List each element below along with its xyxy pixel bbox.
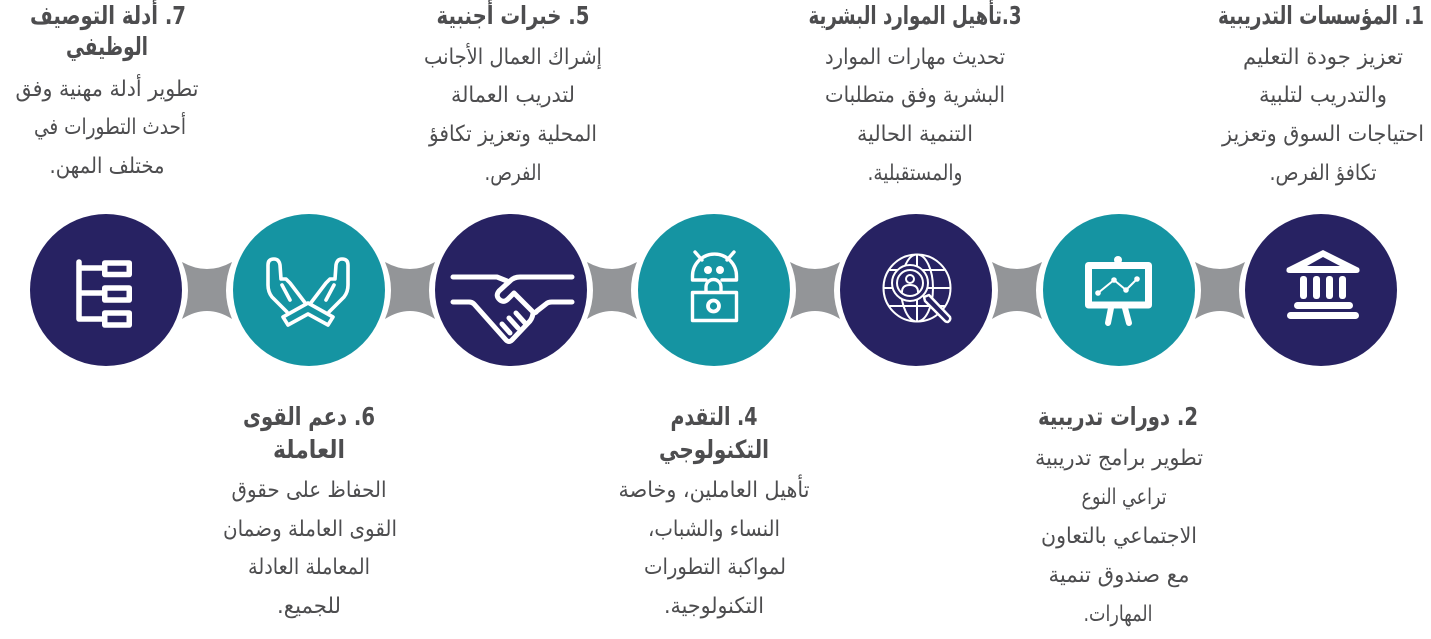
connector: 3 to 4 xyxy=(790,262,840,319)
icon: android lock xyxy=(692,252,736,320)
body: step 7: مختلف المهن. xyxy=(50,154,164,179)
text block: step 2 xyxy=(1035,402,1203,627)
body: step 1: والتدريب لتلبية xyxy=(1259,83,1387,108)
icon: caring hands xyxy=(268,259,348,325)
body: step 6: القوى العاملة وضمان xyxy=(223,517,397,542)
connector: 5 to 6 xyxy=(385,262,435,319)
text block: step 1 xyxy=(1218,1,1424,186)
body: step 3: التنمية الحالية xyxy=(857,122,973,147)
step 6 circle with open hands icon xyxy=(233,214,385,366)
connector: 6 to 7 xyxy=(182,262,232,319)
heading: step 5: 5. خبرات أجنبية xyxy=(436,0,590,31)
body: step 1: تكافؤ الفرص. xyxy=(1270,161,1376,186)
icon: globe and magnifier xyxy=(884,254,950,322)
step 7 circle with hierarchy icon xyxy=(30,214,182,366)
body: step 4: النساء والشباب، xyxy=(648,517,780,542)
icon: presentation board xyxy=(1088,256,1148,323)
body: step 7: تطوير أدلة مهنية وفق xyxy=(16,74,198,102)
heading: step 6 xyxy=(243,402,375,464)
body: step 2: تطوير برامج تدريبية xyxy=(1035,446,1203,471)
step 2 circle with presentation board icon xyxy=(1043,214,1195,366)
body: step 5: إشراك العمال الأجانب xyxy=(424,43,602,70)
body: step 2: المهارات. xyxy=(1084,602,1152,627)
connector: 1 to 2 xyxy=(1195,262,1245,319)
body: step 1: احتياجات السوق وتعزيز xyxy=(1221,122,1424,147)
body: step 3 xyxy=(825,45,1005,186)
heading: step 4 xyxy=(659,402,769,465)
body: step 6: الحفاظ على حقوق xyxy=(232,478,386,503)
body: step 2: مع صندوق تنمية xyxy=(1048,563,1190,588)
step 4 circle with robot lock icon xyxy=(638,214,790,366)
body: step 3: البشرية وفق متطلبات xyxy=(825,83,1005,108)
body: step 5: لتدريب العمالة xyxy=(451,83,575,108)
body: step 5 xyxy=(424,43,602,186)
connector: 2 to 3 xyxy=(992,262,1042,319)
heading: step 6: 6. دعم القوى xyxy=(243,402,375,432)
body: step 5: الفرص. xyxy=(484,161,542,186)
step 3 circle with globe search icon xyxy=(840,214,992,366)
body: step 5: المحلية وتعزيز تكافؤ xyxy=(428,122,597,147)
connector: 4 to 5 xyxy=(587,262,637,319)
icon: hierarchy tree xyxy=(79,262,129,325)
body: step 4: تأهيل العاملين، وخاصة xyxy=(618,474,810,503)
body: step 2 xyxy=(1035,446,1203,627)
icon: handshake xyxy=(453,277,572,342)
body: step 2: الاجتماعي بالتعاون xyxy=(1041,524,1197,549)
heading: step 7: الوظيفي xyxy=(66,32,148,62)
body: step 4 xyxy=(618,474,810,619)
heading: step 3: 3.تأهيل الموارد البشرية xyxy=(808,0,1022,31)
body: step 7: أحدث التطورات في xyxy=(34,112,186,140)
body: step 3: والمستقبلية. xyxy=(868,161,962,186)
body: step 6: للجميع. xyxy=(277,594,341,619)
heading: step 6: العاملة xyxy=(273,435,345,464)
body: step 2: تراعي النوع xyxy=(1082,485,1166,510)
heading: step 7: 7. أدلة التوصيف xyxy=(30,0,186,31)
text block: step 5 xyxy=(424,0,602,186)
heading: step 4: التكنولوجي xyxy=(659,435,769,465)
icon: bank xyxy=(1286,250,1360,319)
step 5 circle with handshake icon xyxy=(435,214,587,366)
text block: step 6 xyxy=(223,402,397,619)
body: step 4: التكنولوجية. xyxy=(664,594,764,619)
text block: step 7 xyxy=(16,0,198,179)
body: step 1: تعزيز جودة التعليم xyxy=(1243,45,1403,70)
body: step 6 xyxy=(223,478,397,619)
step 1 circle with bank icon xyxy=(1245,214,1397,366)
body: step 1 xyxy=(1221,45,1424,186)
heading: step 7 xyxy=(30,0,186,62)
text block: step 3 xyxy=(808,0,1022,186)
heading: step 4: 4. التقدم xyxy=(670,402,758,431)
body: step 6: المعاملة العادلة xyxy=(248,555,370,580)
body: step 7 xyxy=(16,74,198,179)
body: step 3: تحديث مهارات الموارد xyxy=(825,45,1005,70)
body: step 4: لمواكبة التطورات xyxy=(644,555,786,580)
heading: step 2: 2. دورات تدريبية xyxy=(1038,402,1198,432)
text block: step 4 xyxy=(618,402,810,619)
